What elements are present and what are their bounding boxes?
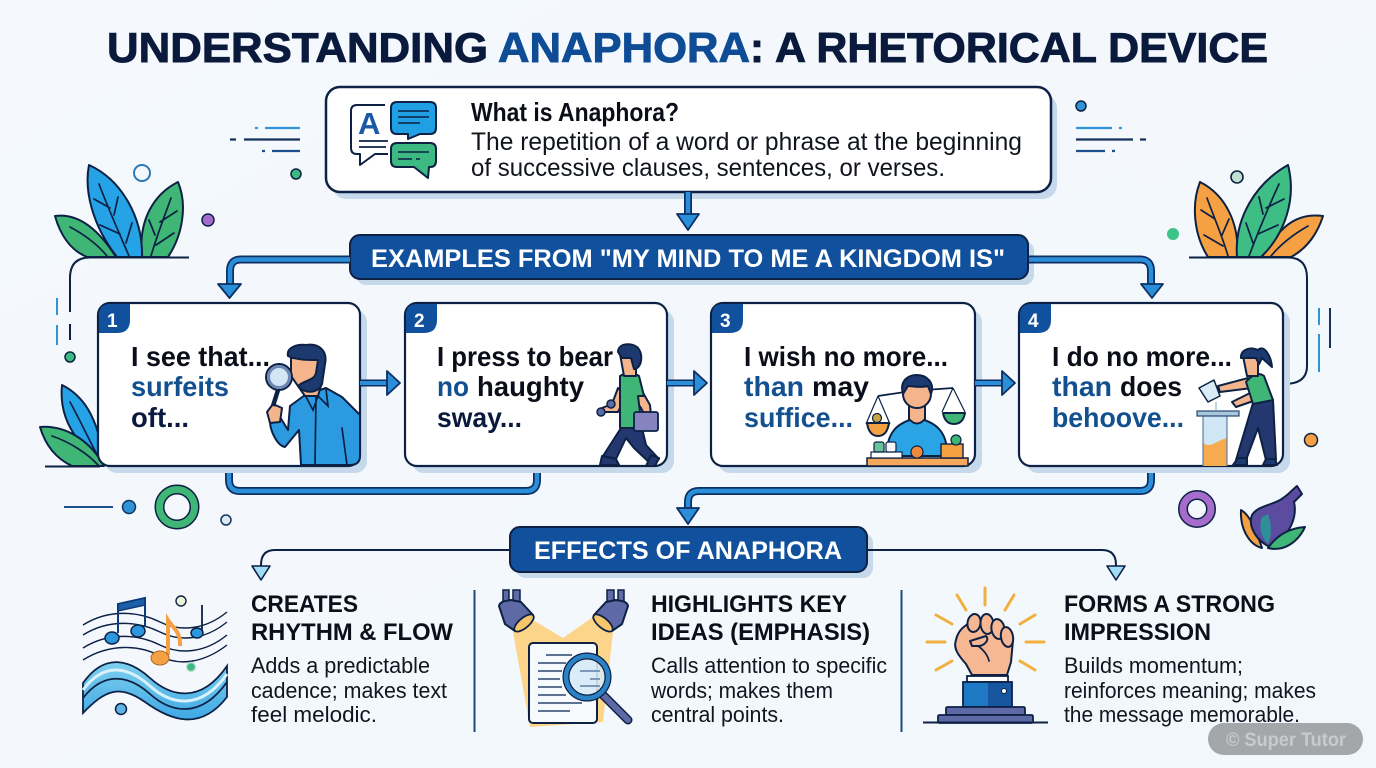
- heading: what is anaphora: What is Anaphora?: [471, 97, 679, 127]
- heading: strong impression: FORMS A STRONG: [1064, 591, 1275, 618]
- quote text 2: [437, 341, 613, 433]
- decoration: top left lines and dots: [230, 128, 301, 179]
- body: strong impression: reinforces meaning; makes: [1064, 678, 1316, 703]
- body: rhythm and flow: feel melodic.: [251, 702, 377, 727]
- panel: example 2: [405, 303, 674, 473]
- connector: card 1 to card 2: [229, 466, 537, 491]
- icon: man with magnifying glass: [266, 345, 360, 465]
- quote text 3: suffice...: [744, 402, 853, 433]
- number badge 4: [1020, 304, 1051, 333]
- quote text 1: I see that...: [131, 341, 270, 372]
- panel: what is anaphora: [326, 87, 1057, 199]
- heading: rhythm and flow: CREATES: [251, 591, 358, 618]
- decoration: top right lines and dots: [1076, 101, 1146, 151]
- number badge 2: 2: [414, 311, 425, 332]
- quote text 3: [744, 341, 948, 433]
- icon: music notes and waves: [83, 596, 227, 719]
- icon: bottom left leaves: [40, 385, 104, 466]
- arrow: effects to right column: [868, 550, 1125, 580]
- arrow: 3 to 4: [975, 371, 1015, 395]
- title: A RHETORICAL DEVICE: [775, 24, 1268, 71]
- watermark: [1208, 723, 1363, 755]
- body: rhythm and flow: [251, 653, 447, 727]
- definition text: [471, 128, 1022, 182]
- quote text 4: behoove...: [1052, 402, 1184, 433]
- quote text 4: does: [1120, 371, 1182, 402]
- definition text: The repetition of a word or phrase at the beginning: [471, 128, 1022, 156]
- body: rhythm and flow: Adds a predictable: [251, 653, 430, 678]
- quote text 1: [131, 341, 270, 433]
- number badge 4: 4: [1028, 311, 1039, 332]
- icon: right leaves: [1167, 165, 1323, 384]
- quote text 4: [1052, 341, 1232, 433]
- heading: effects banner: EFFECTS OF ANAPHORA: [534, 537, 842, 565]
- icon: left leaves: [55, 165, 214, 340]
- body: strong impression: [1064, 653, 1316, 727]
- icon: speech bubbles: [351, 102, 436, 178]
- heading: highlights key ideas: IDEAS (EMPHASIS): [651, 619, 870, 646]
- arrow: definition to examples: [677, 192, 699, 230]
- number badge 3: 3: [720, 311, 731, 332]
- body: highlights key ideas: central points.: [651, 702, 784, 727]
- arrow: 2 to 3: [667, 371, 707, 395]
- connector: card 4 to effects: [677, 466, 1151, 524]
- quote text 2: haughty: [477, 371, 584, 402]
- icon: speech bubbles: A: [358, 106, 380, 141]
- panel: example 1: [98, 303, 367, 473]
- arrow: examples to card 1: [218, 260, 350, 298]
- decoration: bottom right ring and plant: [1183, 486, 1305, 549]
- panel: example 3: [711, 303, 982, 473]
- definition text: of successive clauses, sentences, or verses.: [471, 154, 945, 182]
- number badge 2: [406, 304, 437, 333]
- heading: highlights key ideas: [651, 591, 870, 646]
- heading: strong impression: [1064, 591, 1275, 646]
- heading: highlights key ideas: HIGHLIGHTS KEY: [651, 591, 847, 618]
- quote text 2: I press to bear: [437, 341, 613, 372]
- icon: spotlights on document with magnifier: [499, 590, 628, 727]
- body: rhythm and flow: cadence; makes text: [251, 678, 447, 703]
- body: strong impression: the message memorable.: [1064, 702, 1300, 727]
- panel: example 4: [1019, 303, 1290, 473]
- watermark: © Super Tutor: [1226, 730, 1347, 751]
- title: :: [750, 24, 764, 71]
- number badge 3: [712, 304, 743, 333]
- quote text 4: I do no more...: [1052, 341, 1232, 372]
- body: highlights key ideas: words; makes them: [650, 678, 833, 703]
- icon: raised fist with rays: [923, 588, 1048, 723]
- arrow: examples to card 4: [1029, 260, 1163, 298]
- icon: walking figure: [597, 344, 659, 466]
- quote text 1: oft...: [131, 402, 189, 433]
- body: highlights key ideas: Calls attention to specific: [651, 653, 887, 678]
- number badge 1: [99, 304, 130, 333]
- title: [107, 24, 1268, 71]
- panel: effect strong impression: [923, 588, 1316, 727]
- quote text 3: than: [744, 371, 804, 402]
- body: highlights key ideas: [650, 653, 887, 727]
- heading: examples banner: [350, 235, 1034, 285]
- number badge 1: 1: [107, 311, 118, 332]
- panel: effect rhythm and flow: [83, 591, 453, 727]
- quote text 3: I wish no more...: [744, 341, 948, 372]
- title: UNDERSTANDING: [107, 24, 488, 71]
- quote text 2: no: [437, 371, 469, 402]
- icon: woman pouring water: [1197, 348, 1277, 466]
- arrow: effects to left column: [252, 550, 510, 580]
- heading: rhythm and flow: [251, 591, 453, 646]
- quote text 2: sway...: [437, 402, 522, 433]
- heading: examples banner: EXAMPLES FROM "MY MIND TO ME A KINGDOM IS": [371, 245, 1005, 273]
- heading: effects banner: [510, 527, 873, 578]
- quote text 1: surfeits: [131, 371, 229, 402]
- decoration: left side dashes: [57, 298, 75, 362]
- quote text 4: than: [1052, 371, 1112, 402]
- heading: rhythm and flow: RHYTHM & FLOW: [251, 619, 453, 646]
- panel: effect highlights key ideas: [499, 590, 887, 727]
- icon: person with scales and table: [866, 375, 968, 466]
- arrow: 1 to 2: [360, 371, 400, 395]
- title: ANAPHORA: [498, 24, 750, 71]
- quote text 3: may: [812, 371, 869, 402]
- decoration: right side dashes: [1304, 308, 1330, 446]
- decoration: bottom left line and rings: [64, 490, 231, 525]
- body: strong impression: Builds momentum;: [1064, 653, 1243, 678]
- heading: strong impression: IMPRESSION: [1064, 619, 1211, 646]
